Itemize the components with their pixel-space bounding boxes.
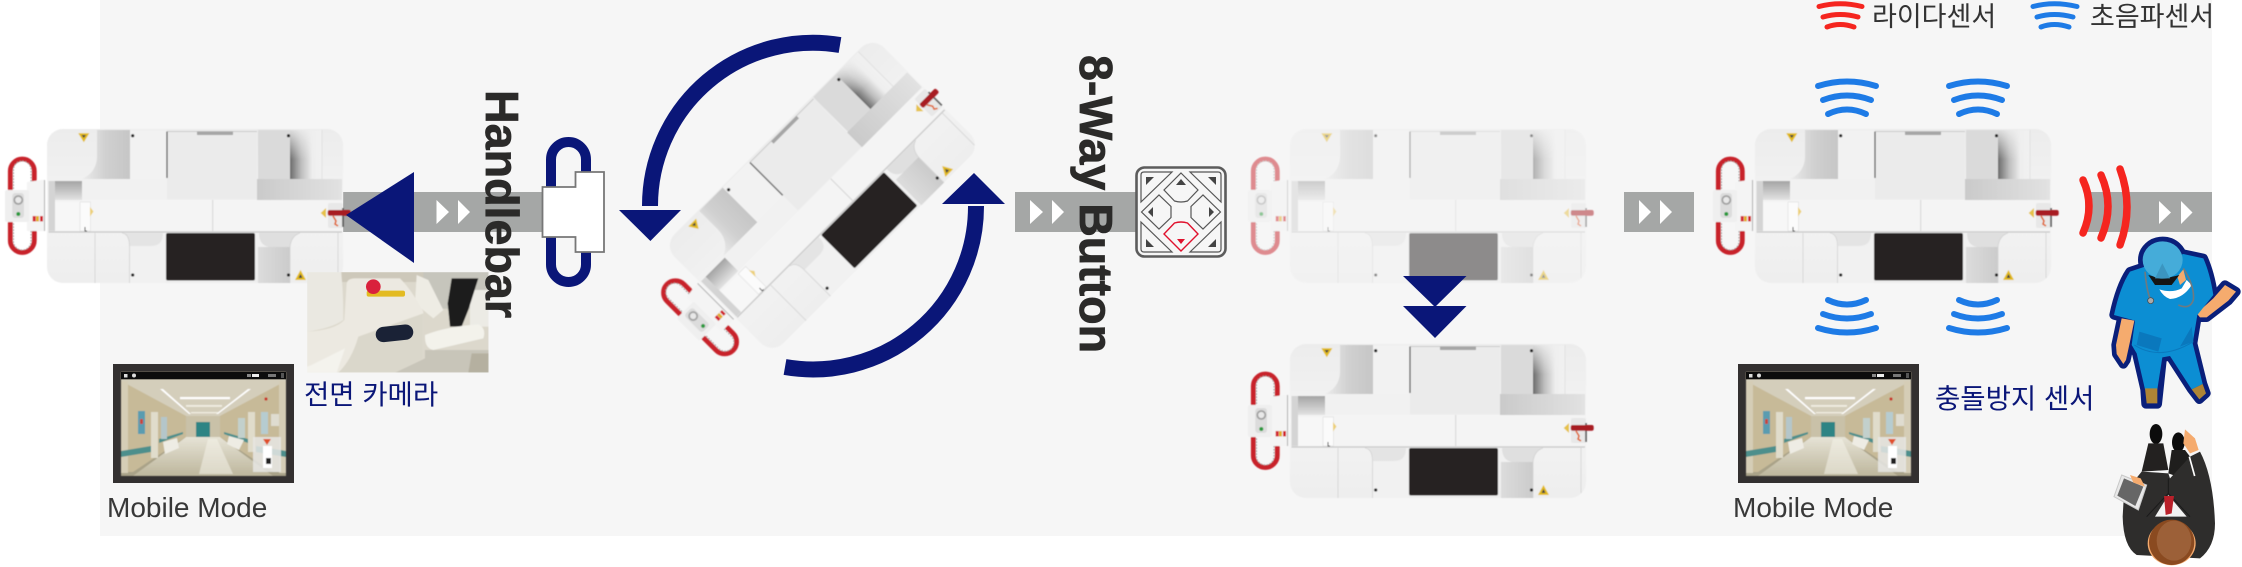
robot: after moving <box>1248 344 1594 498</box>
label: front camera: 전면 카메라 <box>304 379 438 410</box>
arrow: rotation upper <box>619 43 840 241</box>
tablet: mobile mode screen left <box>113 364 294 483</box>
person: doctor <box>2114 241 2236 404</box>
arrow: double down <box>1403 276 1466 338</box>
label: Handlebar: Handlebar <box>476 90 528 318</box>
person: businessman <box>2114 424 2215 565</box>
lidar waves <box>2083 169 2127 245</box>
flow bar: to sensors <box>1624 192 1694 232</box>
ultrasonic waves: bottom right <box>1949 300 2007 332</box>
label: 8-Way Button: 8-Way Button <box>1070 55 1122 353</box>
legend: ultrasonic sensor <box>2033 2 2214 32</box>
legend: lidar sensor: 라이다센서 <box>1872 2 1996 32</box>
ultrasonic waves: bottom left <box>1818 300 1876 332</box>
robot: rotating <box>634 31 987 384</box>
ultrasonic waves: top left <box>1818 82 1876 114</box>
robot: with sensors <box>1713 129 2059 283</box>
label: collision avoidance sensor: 충돌방지 센서 <box>1935 383 2094 414</box>
robot: mobile mode front <box>5 129 351 283</box>
legend: ultrasonic sensor: 초음파센서 <box>2090 2 2214 32</box>
label: mobile mode left: Mobile Mode <box>107 492 267 523</box>
robot: before moving (faded) <box>1248 129 1594 283</box>
ultrasonic waves: top right <box>1949 82 2007 114</box>
icon: handlebar <box>542 142 604 282</box>
photo: front camera <box>307 272 489 373</box>
flow bar: handlebar to robot <box>343 192 543 232</box>
arrow: move forward navy triangle <box>346 172 414 263</box>
arrow: rotation lower <box>785 173 1005 369</box>
label: mobile mode right: Mobile Mode <box>1733 492 1893 523</box>
flow bar: rotate to 8-way button <box>1015 192 1137 232</box>
tablet: mobile mode screen right <box>1738 364 1919 483</box>
icon: 8-way button <box>1136 168 1226 256</box>
flow bar: to people <box>2085 192 2212 232</box>
